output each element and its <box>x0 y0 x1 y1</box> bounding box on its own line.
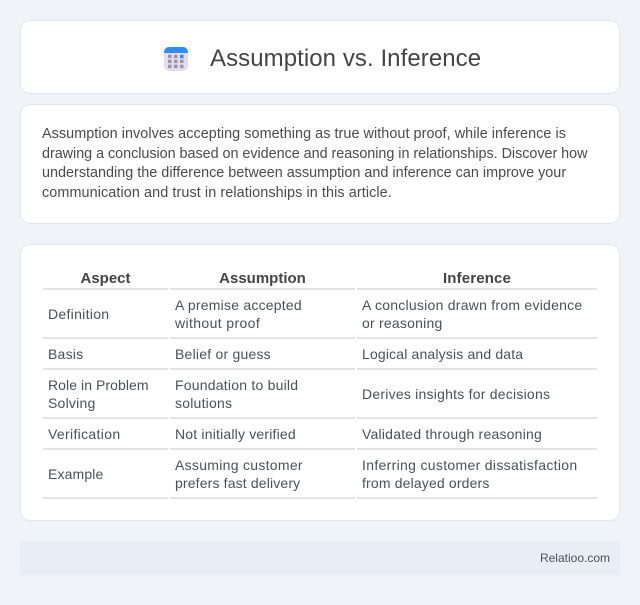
row: Role in Problem Solving: Role in Problem <box>48 377 149 393</box>
row: Role in Problem Solving <box>48 377 550 411</box>
header: Assumption: Assumption <box>219 270 306 287</box>
footer text: Relatioo.com <box>540 551 610 565</box>
row: Definition: Definition <box>48 306 109 322</box>
text block: intro paragraph: Assumption involves accepting something as true without proof, while inference is <box>42 126 566 142</box>
row: Basis: Logical analysis and data <box>362 346 523 362</box>
row: Verification: Validated through reasoning <box>362 426 542 442</box>
row: Example: Assuming customer <box>175 457 303 473</box>
row: Verification <box>48 426 542 442</box>
row: Verification: Verification <box>48 426 120 442</box>
panel: title card <box>20 20 620 94</box>
header: Aspect: Aspect <box>80 270 131 287</box>
text block: intro paragraph: understanding the difference between assumption and inference can improve your <box>42 165 566 181</box>
row: Example: Example <box>48 466 103 482</box>
panel: intro <box>20 104 620 224</box>
row: Role in Problem Solving: Solving <box>48 395 95 411</box>
row: Example <box>48 457 578 491</box>
panel: comparison table <box>20 244 620 521</box>
row: Role in Problem Solving: solutions <box>175 395 232 411</box>
row: Basis: Belief or guess <box>175 346 271 362</box>
row: Basis <box>48 346 524 362</box>
title: Assumption vs. Inference <box>210 45 481 72</box>
row: Verification: Not initially verified <box>175 426 296 442</box>
row: Definition <box>48 297 582 331</box>
footer <box>20 541 620 575</box>
text block: intro paragraph <box>42 126 588 201</box>
comparison table <box>43 270 597 499</box>
icon: calendar <box>164 47 188 71</box>
row: Example: Inferring customer dissatisfaction <box>362 457 578 473</box>
row: Basis: Basis <box>48 346 83 362</box>
row: Example: from delayed orders <box>362 475 490 491</box>
header: Inference: Inference <box>443 270 511 287</box>
row: Definition: without proof <box>175 315 260 331</box>
row: Role in Problem Solving: Derives insights for decisions <box>362 386 550 402</box>
row: Definition: A conclusion drawn from evidence <box>362 297 582 313</box>
text block: intro paragraph: communication and trust in relationships in this article. <box>42 185 392 201</box>
row: Definition: or reasoning <box>362 315 442 331</box>
row: Role in Problem Solving: Foundation to build <box>175 377 298 393</box>
row: Example: prefers fast delivery <box>175 475 300 491</box>
row: Definition: A premise accepted <box>175 297 302 313</box>
text block: intro paragraph: drawing a conclusion based on evidence and reasoning in relationships. Discover how <box>42 146 587 162</box>
